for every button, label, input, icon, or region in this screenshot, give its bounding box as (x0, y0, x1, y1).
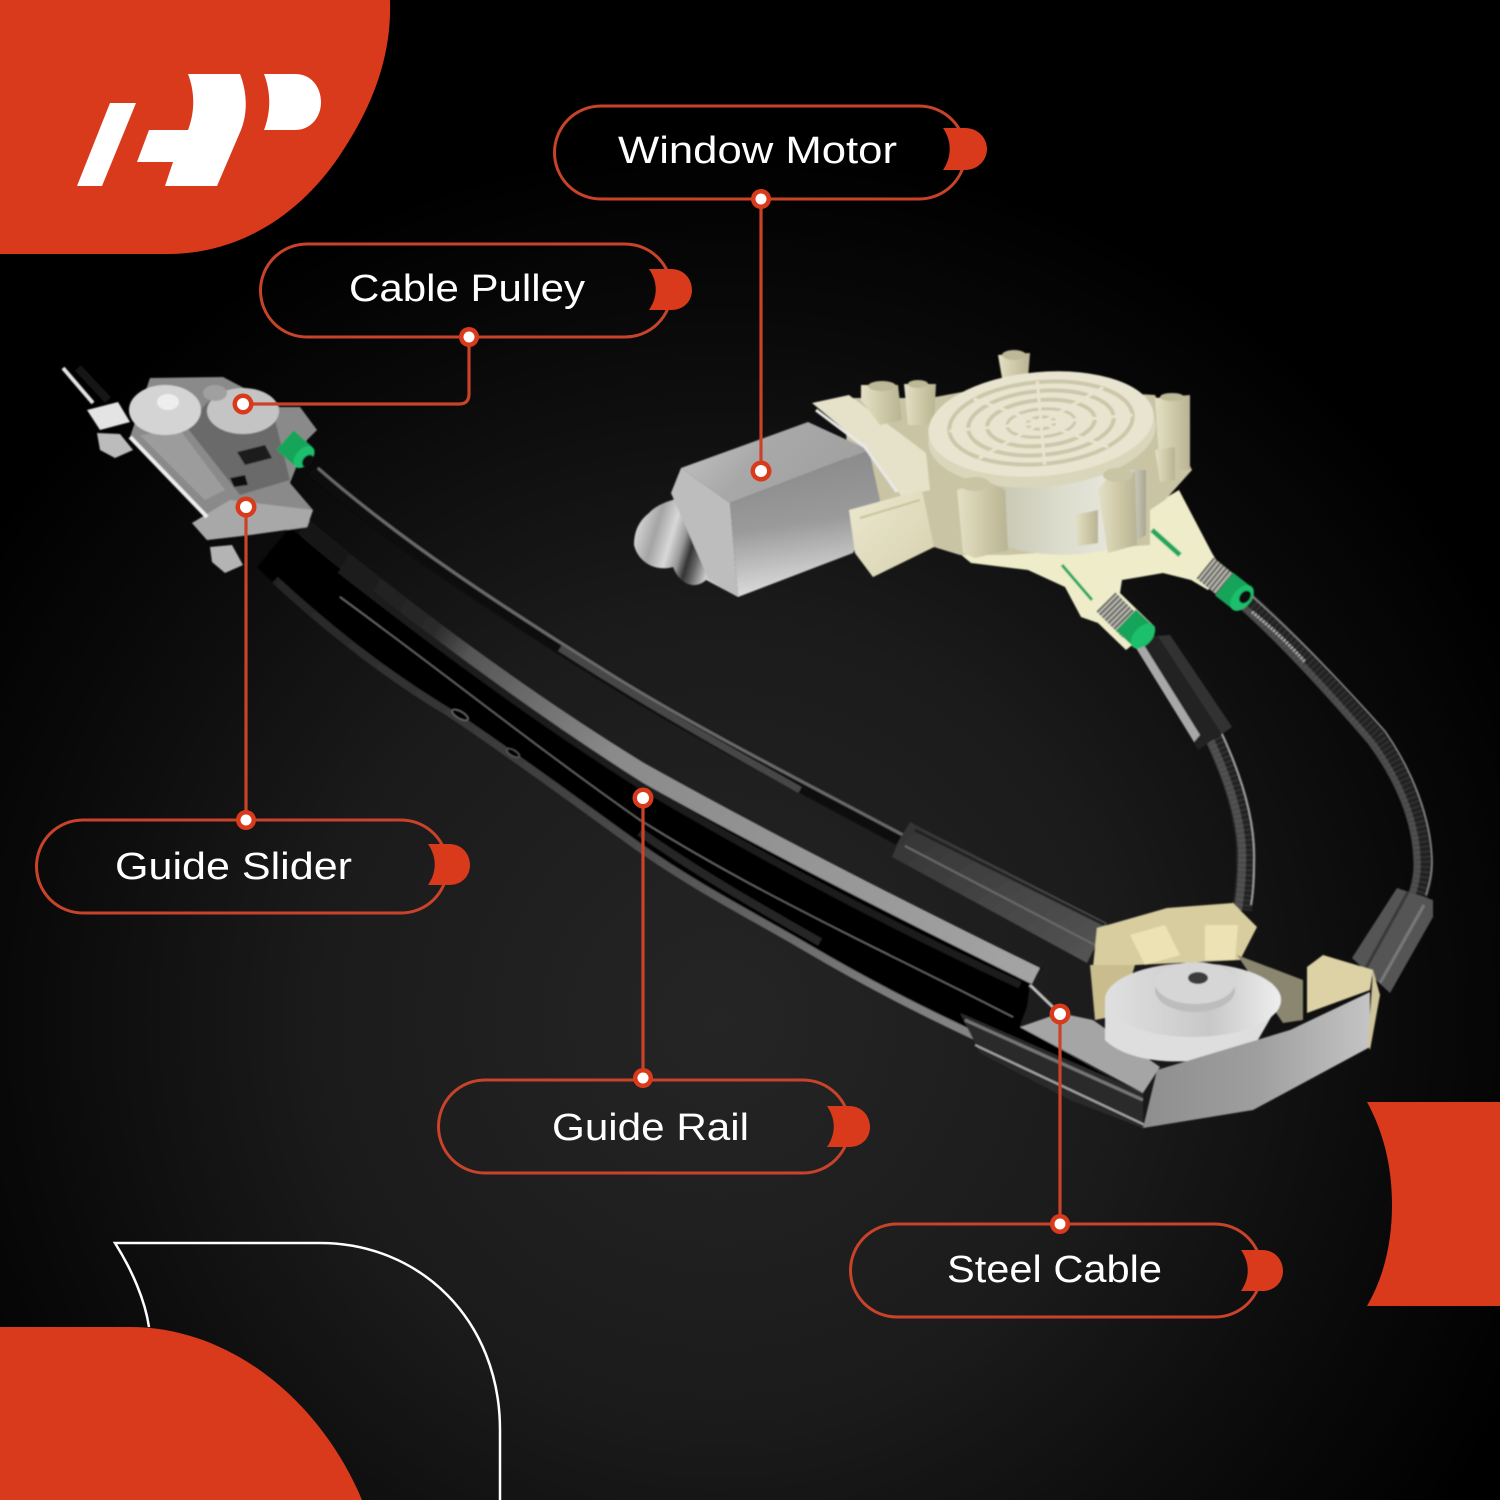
label: Steel Cable (850, 1224, 1283, 1317)
logo panel: top-left red corner with A-P mark (0, 0, 390, 254)
housing disc (923, 362, 1160, 497)
guide rail (257, 515, 1130, 1112)
black cable sleeve (1136, 635, 1232, 750)
pointer: Steel Cable (1050, 1004, 1070, 1234)
gearbox flange (812, 395, 930, 497)
label: Window Motor (554, 106, 987, 199)
front posts (957, 447, 1175, 558)
label: Cable Pulley: Cable Pulley (349, 268, 585, 310)
slider assembly (63, 368, 319, 573)
gearbox underlay (845, 385, 1192, 577)
label: Guide Slider: Guide Slider (115, 846, 352, 888)
label: Steel Cable: Steel Cable (947, 1249, 1162, 1291)
pulley (1105, 1000, 1281, 1061)
thin upper cable and sleeve (312, 468, 1107, 963)
motor can (634, 422, 880, 597)
logo mark (77, 74, 321, 186)
bottom bracket with pulley (960, 903, 1380, 1128)
window motor (634, 350, 1192, 597)
pointer: Guide Rail (632, 788, 654, 1088)
label: Guide Rail: Guide Rail (552, 1107, 749, 1149)
pointer: Guide Slider (236, 496, 256, 830)
clips (1093, 903, 1257, 967)
right conduit (1241, 596, 1432, 900)
springs and green ferrules (1106, 568, 1259, 653)
pointer: Cable Pulley (232, 327, 479, 414)
label: Window Motor: Window Motor (618, 130, 897, 172)
label: Guide Slider (36, 820, 470, 913)
label: Cable Pulley (260, 244, 692, 337)
motor base plate (959, 490, 1225, 650)
product: window regulator assembly (63, 350, 1433, 1128)
gear housing cylinder (1003, 470, 1146, 555)
pointer: Window Motor (750, 189, 772, 482)
right grey sleeve (1352, 888, 1433, 993)
back posts (861, 353, 1190, 470)
label: Guide Rail (438, 1080, 870, 1173)
left conduit (1209, 734, 1254, 910)
bracket front face (1143, 992, 1370, 1128)
decorative shape: bottom-left red quarter with white outline (0, 1243, 500, 1500)
decorative shape: right red tab (1367, 1102, 1500, 1306)
connector (849, 490, 934, 577)
